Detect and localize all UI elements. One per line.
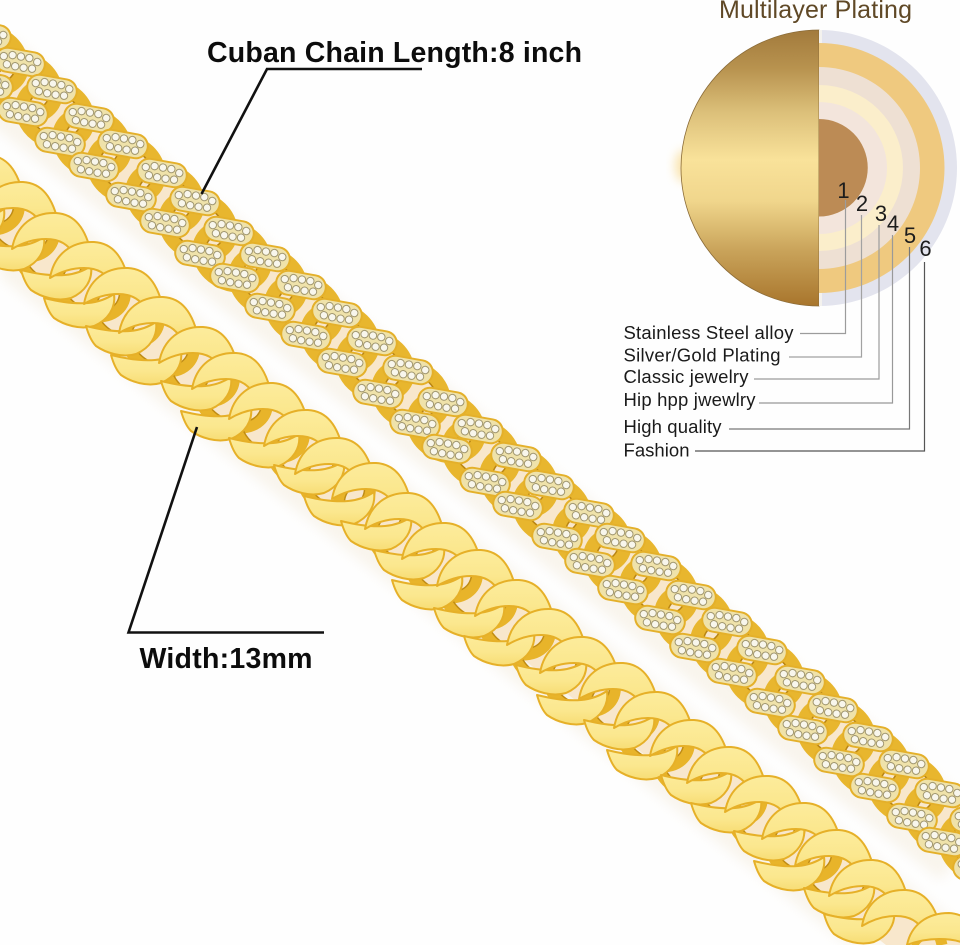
callout: chain length [202, 37, 582, 194]
callout: chain width: Width:13mm [140, 643, 312, 675]
callout: chain width [128, 427, 324, 675]
layer numbers: 3 [875, 201, 887, 226]
layer labels [624, 322, 794, 460]
layer numbers: 1 [837, 178, 850, 203]
layer labels: Silver/Gold Plating [624, 344, 780, 366]
layer numbers: 2 [856, 191, 868, 216]
layer numbers: 5 [904, 223, 916, 248]
callout: chain length: Cuban Chain Length:8 inch [207, 37, 582, 69]
layer labels: High quality [624, 416, 722, 437]
layer labels: Stainless Steel alloy [624, 322, 794, 343]
layer numbers: 6 [919, 236, 932, 261]
layer labels: Hip hpp jwewlry [624, 389, 756, 410]
panel: multilayer plating diagram [624, 0, 957, 460]
layer labels: Fashion [624, 440, 690, 460]
layer numbers [837, 178, 932, 261]
leader lines [695, 200, 924, 451]
cross-section sphere [675, 30, 957, 306]
layer numbers: 4 [887, 211, 899, 236]
layer labels: Classic jewelry [624, 366, 749, 387]
